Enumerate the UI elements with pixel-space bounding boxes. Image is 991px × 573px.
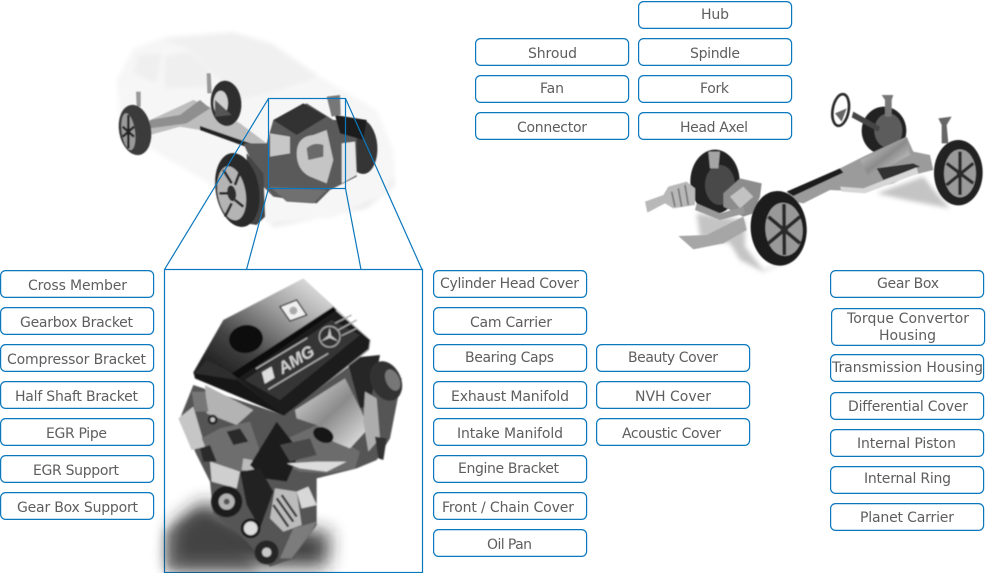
turbo assembly <box>347 355 380 408</box>
label column: bracket parts <box>1 271 154 519</box>
label: Fork: Fork <box>700 81 730 97</box>
label: Gear Box Support: Gear Box Support <box>17 500 138 516</box>
label: Front / Chain Cover: Front / Chain Cover <box>442 500 574 516</box>
label: Fan <box>476 76 629 102</box>
engine highlight box <box>268 98 346 188</box>
label: Intake Manifold: Intake Manifold <box>457 426 563 442</box>
label: Connector <box>476 113 629 139</box>
steering wheel <box>830 93 851 127</box>
label column: cooling parts <box>476 39 629 139</box>
engine floor shadow <box>170 502 330 567</box>
springs <box>882 95 893 117</box>
label: Spindle <box>639 39 792 65</box>
right front wheel <box>344 118 379 175</box>
label: Cross Member <box>1 271 154 297</box>
label: Gear Box <box>831 271 984 297</box>
label: Cross Member: Cross Member <box>28 278 127 294</box>
label: Head Axel <box>639 113 792 139</box>
left suspension <box>708 152 720 168</box>
label: Front / Chain Cover <box>434 493 587 519</box>
label: Gear Box Support <box>1 493 154 519</box>
label: Compressor Bracket: Compressor Bracket <box>7 352 146 368</box>
chassis ground shadow <box>697 177 950 272</box>
label: Hub: Hub <box>701 7 729 23</box>
label: Torque Convertor Housing: Housing <box>879 328 936 344</box>
label: Exhaust Manifold <box>434 382 587 408</box>
rear far wheel <box>862 107 906 155</box>
label: Gear Box: Gear Box <box>877 276 939 292</box>
label: EGR Support: EGR Support <box>33 463 120 479</box>
label: Beauty Cover <box>597 345 750 371</box>
label: EGR Pipe: EGR Pipe <box>46 426 107 442</box>
oil filler opening <box>227 323 265 355</box>
label: Exhaust Manifold: Exhaust Manifold <box>451 389 569 405</box>
label: Acoustic Cover <box>597 419 750 445</box>
label: Bearing Caps: Bearing Caps <box>465 350 554 366</box>
label: Head Axel: Head Axel <box>680 120 748 136</box>
car illustration <box>115 32 395 231</box>
label: Compressor Bracket <box>1 345 154 371</box>
label: Torque Convertor Housing: Torque Convertor <box>846 311 969 327</box>
label: Half Shaft Bracket: Half Shaft Bracket <box>15 389 138 405</box>
label: Gearbox Bracket <box>1 308 154 334</box>
label: Differential Cover <box>831 393 984 419</box>
label: Cylinder Head Cover <box>434 271 587 297</box>
sticker <box>280 300 307 321</box>
chassis illustration <box>645 93 983 272</box>
zoom callout lines <box>164 98 422 270</box>
label: Shroud: Shroud <box>528 46 577 62</box>
label: Beauty Cover: Beauty Cover <box>628 350 718 366</box>
label: Cam Carrier <box>434 308 587 334</box>
label: Bearing Caps <box>434 345 587 371</box>
label: Differential Cover: Differential Cover <box>848 399 968 415</box>
front wheel <box>748 189 809 268</box>
label: NVH Cover: NVH Cover <box>635 389 711 405</box>
drive shaft and transmission <box>787 137 933 203</box>
engine bay <box>243 103 357 203</box>
label: Engine Bracket: Engine Bracket <box>458 461 560 477</box>
label: Fork <box>639 76 792 102</box>
label column: transmission parts <box>831 271 985 530</box>
label: Oil Pan: Oil Pan <box>487 537 532 553</box>
label: Cylinder Head Cover: Cylinder Head Cover <box>440 276 579 292</box>
label: Oil Pan <box>434 530 587 556</box>
label: EGR Support <box>1 456 154 482</box>
label: Planet Carrier: Planet Carrier <box>860 510 954 526</box>
label: Acoustic Cover: Acoustic Cover <box>622 426 721 442</box>
pulleys and alternator <box>240 468 273 528</box>
label: Internal Piston: Internal Piston <box>857 436 956 452</box>
label: Planet Carrier <box>831 504 984 530</box>
AMG badge <box>256 333 328 389</box>
label: Transmission Housing: Transmission Housing <box>831 360 983 376</box>
label: Engine Bracket <box>434 456 587 482</box>
left wheel <box>690 150 740 214</box>
label: Transmission Housing <box>831 355 984 381</box>
exhaust manifold <box>273 425 360 473</box>
AMG badge: AMG <box>274 341 318 378</box>
label column: engine parts <box>434 271 587 556</box>
label: Half Shaft Bracket <box>1 382 154 408</box>
label: Gearbox Bracket: Gearbox Bracket <box>20 315 134 331</box>
label: Connector: Connector <box>517 120 587 136</box>
left block castings <box>205 385 253 425</box>
label: Internal Ring: Internal Ring <box>864 471 951 487</box>
rear axle and shaft <box>147 100 267 153</box>
label: Shroud <box>476 39 629 65</box>
car body ghost <box>117 32 395 227</box>
label: EGR Pipe <box>1 419 154 445</box>
label: Spindle: Spindle <box>690 46 740 62</box>
panel: engine close-up <box>164 270 422 572</box>
label column: covers <box>597 345 750 445</box>
rear wheels <box>209 80 243 127</box>
engine base silhouette <box>180 358 402 567</box>
label column: axle parts <box>639 2 792 139</box>
label: Torque Convertor Housing <box>832 309 985 345</box>
label: NVH Cover <box>597 382 750 408</box>
heat shield <box>295 378 368 448</box>
label: Internal Ring <box>831 467 984 493</box>
label: Internal Piston <box>831 430 984 456</box>
right wheel <box>934 140 983 205</box>
engine cover <box>193 278 371 416</box>
label: Fan: Fan <box>540 81 564 97</box>
label: Hub <box>639 2 792 28</box>
label: Intake Manifold <box>434 419 587 445</box>
Mercedes star <box>319 326 340 347</box>
label: Cam Carrier: Cam Carrier <box>470 315 552 331</box>
front wheel <box>247 153 265 225</box>
exhaust tail left <box>645 182 695 213</box>
